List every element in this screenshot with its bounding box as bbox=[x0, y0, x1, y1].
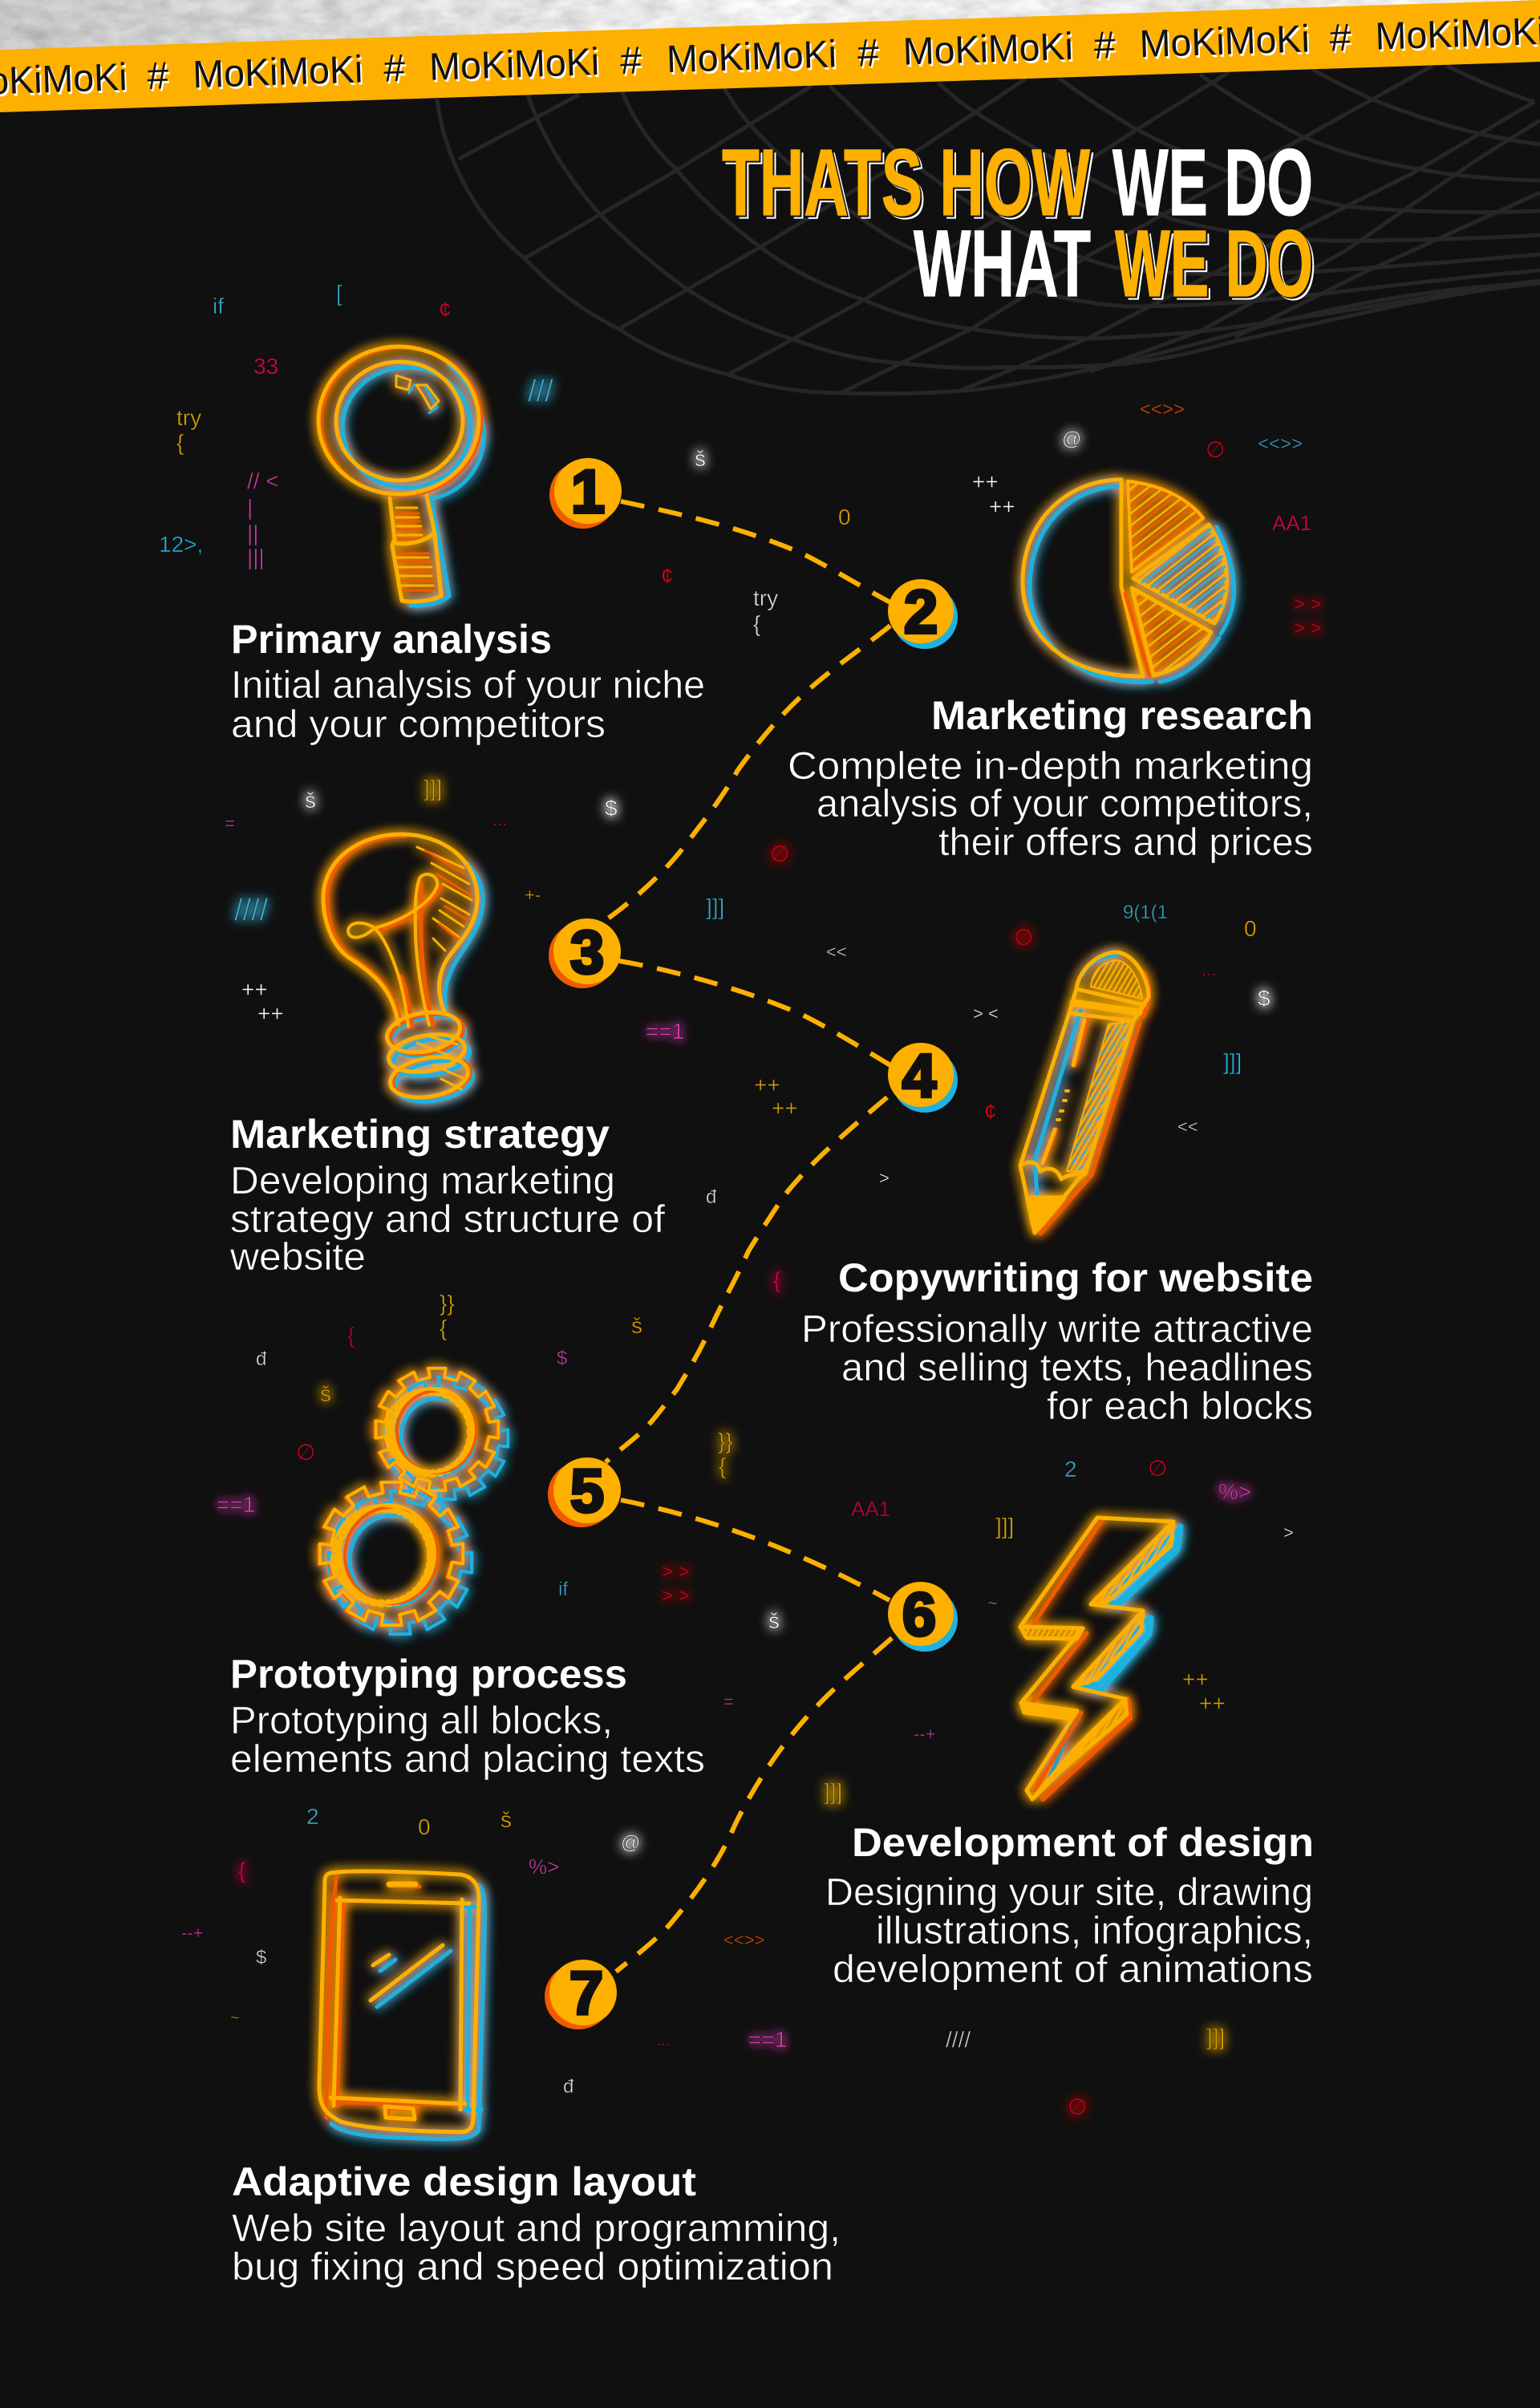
decorative code glyphs: ¢ bbox=[439, 297, 452, 322]
text block: Marketing strategy description bbox=[229, 1160, 666, 1279]
text block: Prototyping description: Prototyping all blocks, bbox=[230, 1700, 613, 1742]
decorative code glyphs: { bbox=[753, 611, 760, 636]
banner: yellow ribbon: # bbox=[1331, 19, 1354, 62]
title: WE DO bbox=[1116, 213, 1315, 318]
decorative code glyphs: // < bbox=[247, 468, 279, 493]
decorative code glyphs: ∅ bbox=[1206, 437, 1225, 462]
badge 4 bbox=[888, 1042, 958, 1113]
decorative code glyphs: 9(1(1 bbox=[1123, 902, 1168, 923]
text block: Copywriting description bbox=[801, 1308, 1313, 1428]
banner: yellow ribbon: # bbox=[858, 34, 881, 77]
decorative code glyphs: ++ bbox=[754, 1072, 780, 1097]
banner: yellow ribbon: # bbox=[857, 32, 880, 75]
text block: Copywriting description: for each blocks bbox=[1047, 1385, 1313, 1428]
text block: Development description: illustrations, infographics, bbox=[876, 1910, 1313, 1952]
title: WHAT bbox=[914, 211, 1091, 317]
decorative code glyphs: [ bbox=[336, 281, 342, 306]
decorative code glyphs: ... bbox=[1202, 959, 1216, 979]
decorative code glyphs: ]]] bbox=[424, 776, 442, 801]
text block: Development description: development of animations bbox=[833, 1948, 1313, 1991]
decorative code glyphs: ∅ bbox=[770, 841, 789, 866]
badge 6 bbox=[888, 1581, 958, 1652]
decorative code glyphs: 2 bbox=[1064, 1457, 1077, 1482]
decorative code glyphs: ==1 bbox=[217, 1492, 255, 1517]
decorative code glyphs: š bbox=[768, 1608, 780, 1633]
icon: magnifying glass bbox=[318, 347, 484, 606]
decorative code glyphs: ++ bbox=[989, 494, 1015, 519]
decorative code glyphs: ~ bbox=[987, 1593, 998, 1613]
title: THATS HOW bbox=[725, 133, 1093, 239]
decorative code glyphs: ]]] bbox=[1223, 1049, 1242, 1074]
decorative code glyphs: @ bbox=[1062, 428, 1081, 450]
decorative code glyphs: +- bbox=[525, 885, 541, 905]
badge 5: 5 bbox=[570, 1457, 604, 1526]
banner: yellow ribbon: MoKiMoKi bbox=[430, 43, 602, 91]
decorative code glyphs: { bbox=[440, 1315, 447, 1340]
banner: yellow ribbon: # bbox=[1095, 26, 1118, 70]
icon: light bulb bbox=[323, 834, 483, 1107]
text block: Copywriting description: and selling texts, headlines bbox=[841, 1347, 1313, 1389]
decorative code glyphs: { bbox=[176, 430, 184, 455]
text block: Adaptive layout description bbox=[232, 2207, 841, 2288]
badge 2 bbox=[888, 578, 958, 649]
icon: smartphone bbox=[319, 1871, 484, 2139]
badge 4: 4 bbox=[902, 1042, 936, 1110]
decorative code glyphs: AA1 bbox=[851, 1497, 890, 1521]
banner: yellow ribbon: # bbox=[384, 50, 407, 92]
banner: yellow ribbon: MoKiMoKi bbox=[194, 51, 365, 99]
icon: pencil bbox=[1020, 952, 1149, 1234]
decorative code glyphs: try bbox=[753, 586, 778, 610]
decorative code glyphs: --+ bbox=[181, 1923, 204, 1943]
badge 7 bbox=[545, 1960, 617, 2029]
badge 1 bbox=[549, 458, 622, 529]
text block: Development description bbox=[825, 1871, 1313, 1991]
decorative code glyphs: //// bbox=[946, 2027, 971, 2052]
decorative code glyphs: š bbox=[695, 446, 706, 471]
text block: Adaptive layout description: Web site layout and programming, bbox=[232, 2207, 841, 2250]
decorative code glyphs: > bbox=[879, 1168, 890, 1188]
decorative code glyphs: ++ bbox=[772, 1096, 798, 1121]
decorative code glyphs: $ bbox=[557, 1348, 567, 1369]
decorative code glyphs: ]]] bbox=[1206, 2025, 1225, 2049]
decorative code glyphs: << bbox=[826, 942, 847, 962]
decorative code glyphs: ]]] bbox=[706, 894, 724, 919]
decorative code glyphs: 0 bbox=[1244, 916, 1257, 941]
banner: yellow ribbon: # bbox=[621, 42, 644, 85]
decorative code glyphs: š bbox=[500, 1807, 512, 1832]
decorative code glyphs: š bbox=[631, 1313, 642, 1338]
text block: Marketing strategy description: strategy and structure of bbox=[230, 1198, 666, 1241]
title bbox=[722, 130, 1316, 320]
decorative code glyphs: %> bbox=[529, 1855, 559, 1879]
heading: Prototyping process: Prototyping process bbox=[230, 1652, 627, 1697]
decorative code glyphs: ... bbox=[657, 2032, 671, 2049]
badge 5 bbox=[548, 1457, 621, 1527]
text block: Adaptive layout description: bug fixing and speed optimization bbox=[232, 2246, 833, 2288]
text block: Development description: Designing your site, drawing bbox=[825, 1871, 1313, 1914]
heading: Development of design: Development of design bbox=[852, 1820, 1314, 1865]
decorative code glyphs: š bbox=[305, 788, 316, 813]
badge 6: 6 bbox=[902, 1581, 936, 1649]
decorative code glyphs: > bbox=[1283, 1522, 1294, 1542]
decorative code glyphs: > > bbox=[662, 1561, 690, 1583]
decorative code glyphs: đ bbox=[256, 1348, 267, 1370]
banner: yellow ribbon: MoKiMoKi bbox=[192, 48, 363, 96]
decorative code glyphs: { bbox=[719, 1453, 726, 1478]
decorative code glyphs: = bbox=[225, 813, 235, 833]
text block: Marketing strategy description: Developing marketing bbox=[230, 1160, 615, 1202]
decorative code glyphs: | bbox=[247, 495, 253, 520]
badge 2: 2 bbox=[904, 578, 938, 647]
title: WE DO bbox=[1112, 130, 1313, 236]
decorative code glyphs: 33 bbox=[253, 354, 278, 379]
heading: Copywriting for website: Copywriting for website bbox=[838, 1255, 1313, 1300]
decorative code glyphs: ++ bbox=[972, 469, 999, 494]
banner: yellow ribbon: MoKiMoKi bbox=[1139, 18, 1311, 66]
decorative code glyphs: @ bbox=[621, 1832, 640, 1854]
badge 3: 3 bbox=[570, 918, 604, 987]
decorative code glyphs: { bbox=[347, 1323, 355, 1348]
decorative code glyphs: > > bbox=[662, 1585, 690, 1607]
decorative code glyphs: š bbox=[320, 1381, 331, 1406]
decorative code glyphs: try bbox=[176, 405, 201, 430]
decorative code glyphs: { bbox=[773, 1267, 780, 1292]
text block: Prototyping description: elements and placing texts bbox=[230, 1738, 705, 1781]
decorative code glyphs: > > bbox=[1294, 618, 1322, 639]
decorative code glyphs: ++ bbox=[257, 1001, 284, 1026]
decorative code glyphs: ∅ bbox=[296, 1440, 315, 1465]
decorative code glyphs: AA1 bbox=[1272, 511, 1311, 535]
decorative code glyphs: ]]] bbox=[995, 1514, 1014, 1538]
heading: Marketing strategy: Marketing strategy bbox=[230, 1112, 610, 1157]
banner: yellow ribbon: MoKiMoKi bbox=[1141, 20, 1312, 68]
heading: Marketing research: Marketing research bbox=[931, 693, 1313, 738]
banner: yellow ribbon: # bbox=[383, 47, 406, 91]
decorative code glyphs: <<>> bbox=[723, 1930, 764, 1950]
title: THATS HOW bbox=[722, 130, 1090, 236]
decorative code glyphs: ==1 bbox=[646, 1019, 684, 1044]
banner: yellow ribbon: # bbox=[619, 39, 642, 83]
text block: Prototyping description bbox=[230, 1700, 705, 1781]
decorative code glyphs: 0 bbox=[838, 505, 851, 529]
decorative code glyphs: if bbox=[213, 294, 224, 318]
decorative code glyphs: = bbox=[723, 1692, 734, 1712]
decorative code glyphs bbox=[159, 281, 1322, 2119]
decorative code glyphs: --+ bbox=[914, 1724, 935, 1744]
banner: yellow ribbon: # bbox=[1093, 24, 1116, 67]
text block: Primary analysis description bbox=[231, 664, 705, 746]
decorative code glyphs: || bbox=[247, 521, 259, 545]
text block: Marketing research description: Complete in-depth marketing bbox=[788, 745, 1313, 788]
banner: yellow ribbon: # bbox=[147, 55, 169, 98]
banner: yellow ribbon: # bbox=[148, 57, 171, 100]
icon: pie chart bbox=[1023, 480, 1234, 682]
decorative code glyphs: $ bbox=[605, 796, 618, 821]
banner: yellow ribbon: MoKiMoKi bbox=[428, 41, 600, 89]
decorative code glyphs: ∅ bbox=[1014, 925, 1033, 950]
decorative code glyphs: /// bbox=[528, 375, 553, 408]
decorative code glyphs: 12>, bbox=[159, 532, 203, 557]
decorative code glyphs: > < bbox=[973, 1003, 999, 1024]
banner: yellow ribbon: MoKiMoKi bbox=[904, 28, 1076, 76]
decorative code glyphs: %> bbox=[1218, 1479, 1251, 1504]
icon: lightning bolt bbox=[1020, 1518, 1181, 1799]
decorative code glyphs: ++ bbox=[1182, 1667, 1209, 1692]
decorative code glyphs: { bbox=[238, 1858, 245, 1883]
decorative code glyphs: ==1 bbox=[748, 2027, 787, 2052]
banner: yellow ribbon: MoKiMoKi bbox=[667, 35, 839, 83]
decorative code glyphs: ]]] bbox=[824, 1779, 842, 1804]
title: THATS HOW bbox=[723, 132, 1092, 237]
decorative code glyphs: <<>> bbox=[1258, 433, 1303, 455]
banner: yellow ribbon: MoKiMoKi bbox=[902, 26, 1074, 74]
decorative code glyphs: 2 bbox=[306, 1804, 319, 1829]
decorative code glyphs: ¢ bbox=[984, 1099, 997, 1124]
heading: Primary analysis: Primary analysis bbox=[231, 617, 552, 662]
decorative code glyphs: }} bbox=[718, 1429, 733, 1453]
decorative code glyphs: đ bbox=[563, 2076, 574, 2098]
banner: yellow ribbon: # bbox=[1329, 17, 1352, 59]
concrete texture strip bbox=[0, 0, 1540, 50]
title: WE DO bbox=[1118, 214, 1316, 320]
decorative code glyphs: ... bbox=[492, 809, 507, 829]
badge 1: 1 bbox=[571, 458, 605, 526]
decorative code glyphs: //// bbox=[234, 894, 269, 927]
title: WE DO bbox=[1115, 211, 1313, 317]
background: wire globe bbox=[437, 66, 1540, 394]
decorative code glyphs: << bbox=[1177, 1117, 1198, 1137]
heading: Adaptive design layout: Adaptive design layout bbox=[232, 2159, 696, 2204]
decorative code glyphs: ∅ bbox=[1068, 2094, 1087, 2119]
decorative code glyphs: ++ bbox=[241, 977, 268, 1002]
text block: Marketing research description: their offers and prices bbox=[938, 821, 1313, 864]
decorative code glyphs: <<>> bbox=[1140, 399, 1185, 420]
text block: Primary analysis description: and your competitors bbox=[231, 703, 606, 746]
badge 7: 7 bbox=[569, 1960, 603, 2028]
icon: gears bbox=[318, 1368, 508, 1634]
decorative code glyphs: if bbox=[558, 1579, 568, 1600]
decorative code glyphs: đ bbox=[706, 1186, 717, 1208]
decorative code glyphs: ¢ bbox=[661, 563, 674, 588]
decorative code glyphs: $ bbox=[1258, 986, 1270, 1011]
text block: Copywriting description: Professionally write attractive bbox=[801, 1308, 1313, 1351]
text block: Marketing strategy description: website bbox=[229, 1236, 366, 1279]
badge 3 bbox=[549, 918, 621, 988]
arrows: dashed connectors between steps bbox=[605, 501, 892, 1972]
banner: yellow ribbon: MoKiMoKi bbox=[666, 33, 837, 81]
decorative code glyphs: ∅ bbox=[1148, 1456, 1167, 1481]
text block: Marketing research description: analysis of your competitors, bbox=[817, 783, 1313, 825]
decorative code glyphs: $ bbox=[256, 1947, 266, 1968]
decorative code glyphs: }} bbox=[440, 1291, 455, 1315]
decorative code glyphs: 0 bbox=[418, 1814, 431, 1839]
decorative code glyphs: ++ bbox=[1199, 1691, 1226, 1716]
decorative code glyphs: > > bbox=[1294, 594, 1322, 615]
text block: Marketing research description bbox=[788, 745, 1313, 864]
text block: Primary analysis description: Initial analysis of your niche bbox=[231, 664, 705, 707]
decorative code glyphs: ||| bbox=[247, 545, 265, 570]
banner: yellow ribbon bbox=[0, 0, 1540, 112]
decorative code glyphs: ~ bbox=[230, 2009, 240, 2027]
